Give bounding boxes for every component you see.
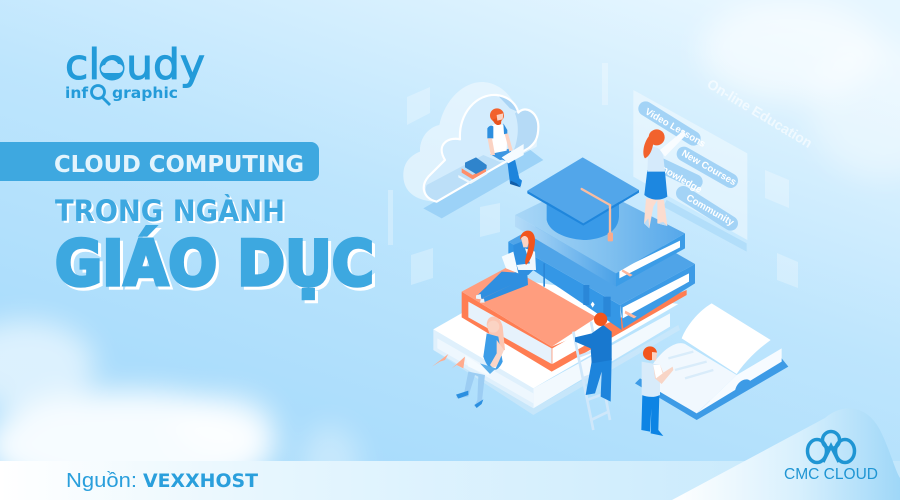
hair [487,316,505,352]
logo subtitle: graphic: graphic [112,84,178,102]
jacket [575,325,612,363]
icon: cloud in logo [100,56,124,80]
board labels: Video Lessons [643,106,707,150]
top book [515,182,685,287]
cloud shadow [423,148,543,218]
decorative floating icon cards [388,63,798,288]
footer band [0,461,900,500]
person: standing woman [643,129,686,228]
person: man on ladder [573,313,612,430]
laptop [465,355,497,375]
source credit: Nguồn: [66,470,137,492]
cloud inner back walls [510,110,538,158]
illustration: graduation cap [527,157,639,241]
books on cloud [458,157,487,184]
board labels: New Courses [679,148,738,188]
icon: cmc cloud [808,432,854,462]
cloud bench [426,148,528,201]
cloud outline [424,95,538,202]
illustration: open book [635,303,788,420]
board labels [643,106,738,229]
logo subtitle: inf: inf [65,84,88,102]
illustration: cloud with man [403,82,543,218]
cloud back [403,82,538,202]
board shadow [663,200,747,252]
person: woman reading on book [476,231,536,303]
man on cloud [487,108,524,187]
corner panel [672,408,900,500]
heading: giáo dục: GIÁO DỤC [55,227,374,300]
ladder [573,322,610,430]
heading: trong ngành: TRONG NGÀNH [55,194,285,228]
illustration: online education board [633,76,815,252]
board [633,90,747,240]
source credit [66,470,258,492]
logo: cmc cloud [784,432,878,483]
pills [646,109,731,223]
person: woman with laptop [456,316,505,408]
trousers [586,358,612,402]
illustration: orange book [462,267,687,372]
illustration: blue books [508,182,695,330]
legs [477,272,528,302]
person: standing man [641,346,673,436]
thick book [508,200,695,330]
board title: On-line Education [704,76,815,151]
logo: cmc cloud: CMC CLOUD [784,466,878,483]
icon: magnifier [92,86,110,105]
logo: cloudy infographic: cloudy [65,40,205,89]
tassel [582,189,610,233]
source credit: VEXXHOST [143,470,258,492]
board labels: Community [684,192,736,229]
board labels: Knowledge [653,160,704,196]
ribbon: cloud computing: CLOUD COMPUTING [54,152,304,178]
illustration: white bottom book [432,280,680,415]
cloud interior [424,95,538,202]
torso [483,333,503,370]
legs [457,372,485,407]
ribbon: cloud computing [0,142,319,181]
